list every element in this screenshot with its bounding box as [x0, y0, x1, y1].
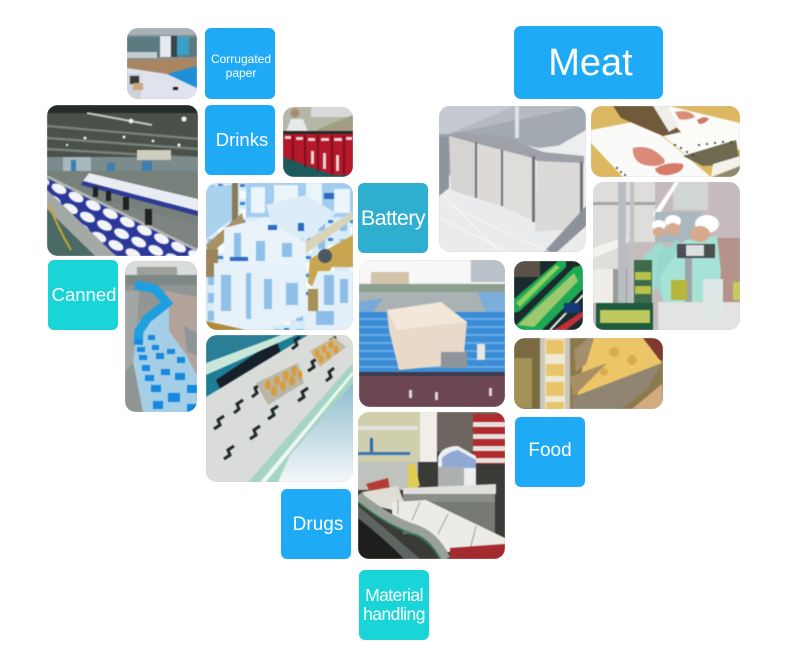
label: food: Food [528, 440, 572, 461]
photo: batteries on conveyor [439, 106, 586, 252]
label: material handling: Material [365, 585, 423, 605]
photo: cola cans on conveyor [283, 107, 353, 177]
photo: meat on white belt [591, 106, 740, 177]
label: battery [358, 183, 428, 253]
label: drugs [281, 489, 351, 559]
label: drinks [205, 105, 275, 175]
label: material handling: handling [363, 604, 425, 624]
label: food [515, 417, 585, 487]
photo: canned production line [47, 105, 198, 256]
label: meat: Meat [548, 42, 633, 84]
photo: water bottles on curved conveyor [125, 261, 197, 412]
label: drugs: Drugs [293, 514, 343, 535]
label: drinks: Drinks [216, 129, 268, 150]
photo: cardboard box on blue belt [359, 260, 505, 407]
label: corrugated paper: paper [226, 66, 256, 80]
label: material handling [359, 570, 429, 640]
label: corrugated paper [205, 28, 275, 99]
label: meat [514, 26, 663, 99]
label: canned [48, 260, 118, 330]
photo: chips on weigher [514, 338, 663, 409]
photo: corrugated paper line [127, 28, 197, 99]
photo: material handling line [358, 412, 505, 559]
label: corrugated paper: Corrugated [211, 52, 271, 66]
photo: workers sorting food [593, 182, 740, 330]
label: canned: Canned [52, 284, 116, 305]
label: battery: Battery [361, 206, 425, 230]
photo: drugs on modular belt [206, 335, 353, 482]
photo: green conveyors [514, 261, 583, 330]
photo: bottled water packs [206, 183, 353, 330]
